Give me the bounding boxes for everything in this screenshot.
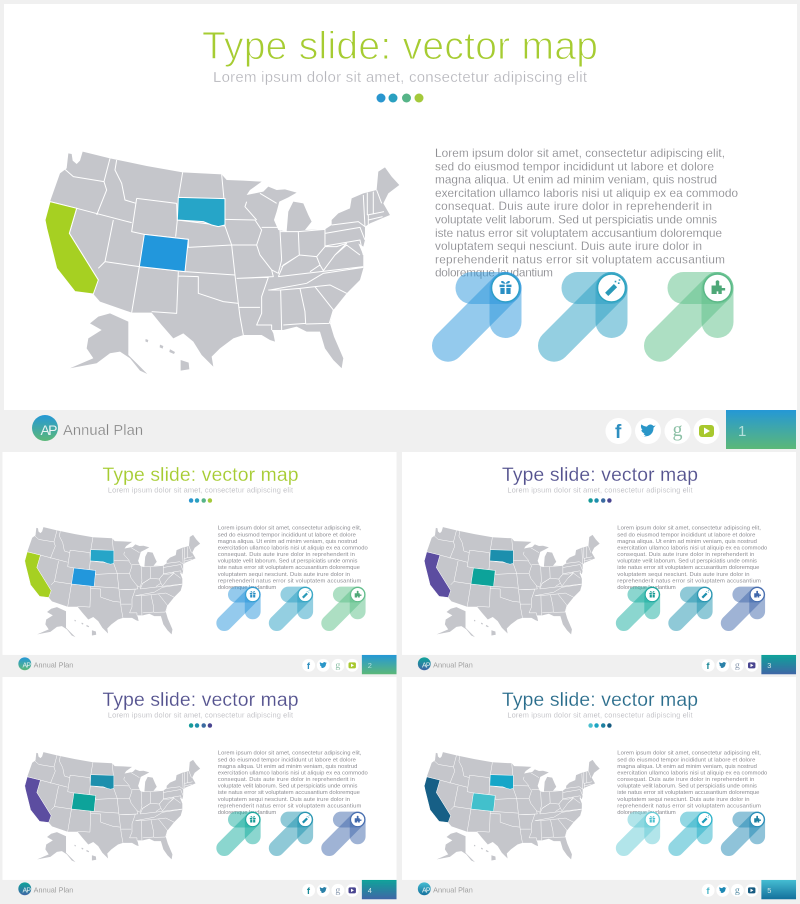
logo: AP — [23, 662, 31, 669]
slide 5 — [402, 677, 796, 899]
body text: consequat. Duis aute irure dolor in reprehenderit in — [218, 552, 355, 558]
body text: voluptate velit laborum. Sed ut perspiciatis unde omnis — [218, 559, 357, 565]
social icons: f — [615, 422, 622, 443]
body text — [218, 526, 368, 591]
body text: reprehenderit natus error sit voluptatem accusantium — [218, 803, 362, 809]
body text: magna aliqua. Ut enim ad minim veniam, quis nostrud — [218, 539, 357, 545]
body text: consequat. Duis aute irure dolor in reprehenderit in — [435, 199, 712, 213]
arrow with puzzle icon — [729, 813, 764, 848]
logo: AP — [23, 887, 31, 894]
pagination dots — [588, 723, 612, 728]
arrow with wand icon — [277, 588, 312, 623]
slide background — [4, 4, 797, 410]
body text: exercitation ullamco laboris nisi ut aliquip ex ea commodo — [218, 545, 368, 551]
slide background — [402, 452, 796, 655]
map of the United States — [424, 527, 600, 637]
body text: voluptatem sequi nesciunt. Duis aute irure dolor in — [218, 797, 350, 803]
body text: sed do eiusmod tempor incididunt ut labore et dolore — [218, 757, 356, 763]
social icons: f — [706, 660, 710, 671]
map of the United States — [45, 152, 399, 374]
arrow with puzzle icon — [329, 588, 365, 623]
body text: voluptatem sequi nesciunt. Duis aute irure dolor in — [218, 572, 350, 578]
social icons: g — [672, 419, 682, 441]
body text: reprehenderit natus error sit voluptatem accusantium — [617, 578, 761, 584]
body text: sed do eiusmod tempor incididunt ut labore et dolore — [617, 532, 755, 538]
body text — [617, 751, 767, 816]
footer bar — [4, 410, 797, 449]
body text: doloremque laudantium — [218, 585, 276, 591]
body text: iste natus error sit voluptatem accusantium doloremque — [617, 790, 759, 796]
body text: exercitation ullamco laboris nisi ut aliquip ex ea commodo — [617, 545, 767, 551]
body text: voluptate velit laborum. Sed ut perspiciatis unde omnis — [617, 559, 757, 565]
body text: sed do eiusmod tempor incididunt ut labore et dolore — [435, 159, 714, 173]
body text: sed do eiusmod tempor incididunt ut labore et dolore — [617, 757, 755, 763]
slide 2 — [2, 452, 397, 674]
logo — [32, 415, 58, 441]
logo — [418, 657, 431, 670]
slide 3 — [402, 452, 796, 674]
body text: consequat. Duis aute irure dolor in reprehenderit in — [617, 552, 754, 558]
body text: Lorem ipsum dolor sit amet, consectetur adipiscing elit, — [617, 526, 761, 532]
page number box: 5 — [767, 886, 771, 895]
logo: AP — [40, 422, 58, 438]
body text: magna aliqua. Ut enim ad minim veniam, quis nostrud — [617, 539, 757, 545]
logo — [18, 882, 31, 895]
body text — [617, 526, 767, 591]
social icons: g — [335, 885, 340, 896]
slide background — [402, 677, 796, 880]
body text: doloremque laudantium — [218, 810, 276, 816]
slide 1: main slide — [4, 4, 797, 449]
title: Type slide: vector map — [202, 25, 598, 68]
arrow with gift icon — [224, 813, 260, 848]
page number box — [761, 880, 796, 899]
footer bar — [2, 655, 397, 674]
arrow with puzzle icon — [729, 588, 764, 623]
pagination dots — [189, 723, 212, 728]
logo — [18, 657, 31, 670]
body text: Lorem ipsum dolor sit amet, consectetur adipiscing elit, — [218, 526, 362, 532]
body text: exercitation ullamco laboris nisi ut aliquip ex ea commodo — [617, 770, 767, 776]
footer bar — [402, 655, 796, 674]
subtitle: Lorem ipsum dolor sit amet, consectetur adipiscing elit — [108, 711, 293, 720]
slide background — [2, 677, 397, 880]
body text: voluptatem sequi nesciunt. Duis aute irure dolor in — [435, 239, 702, 253]
social icons — [606, 418, 720, 444]
body text — [435, 146, 738, 280]
title: Type slide: vector map — [102, 465, 299, 486]
body text: iste natus error sit voluptatem accusantium doloremque — [218, 565, 360, 571]
social icons — [302, 659, 359, 672]
body text: reprehenderit natus error sit voluptatem accusantium — [218, 578, 362, 584]
page number box: 3 — [767, 661, 771, 670]
slide background — [2, 452, 397, 655]
arrow with wand icon — [554, 274, 626, 346]
footer bar — [2, 880, 397, 899]
pagination dots — [189, 498, 212, 503]
page number box — [362, 655, 397, 674]
logo: AP — [422, 662, 431, 669]
arrow with puzzle icon — [329, 813, 365, 848]
title: Type slide: vector map — [102, 690, 299, 711]
body text: iste natus error sit voluptatem accusantium doloremque — [218, 790, 360, 796]
social icons: f — [307, 660, 311, 671]
page number box — [362, 880, 397, 899]
social icons: f — [307, 885, 311, 896]
body text: sed do eiusmod tempor incididunt ut labore et dolore — [218, 532, 356, 538]
pagination dots — [588, 498, 612, 503]
body text: voluptate velit laborum. Sed ut perspiciatis unde omnis — [435, 212, 717, 226]
body text: magna aliqua. Ut enim ad minim veniam, quis nostrud — [435, 173, 717, 187]
body text: Lorem ipsum dolor sit amet, consectetur adipiscing elit, — [435, 146, 725, 160]
brand name: Annual Plan — [433, 885, 473, 894]
arrow with gift icon — [624, 813, 659, 848]
pagination dots — [376, 94, 424, 102]
footer bar — [402, 880, 796, 899]
subtitle: Lorem ipsum dolor sit amet, consectetur adipiscing elit — [213, 69, 588, 86]
arrow with gift icon — [224, 588, 260, 623]
body text: doloremque laudantium — [617, 585, 676, 591]
social icons — [702, 659, 758, 672]
arrow with gift icon — [624, 588, 659, 623]
social icons — [302, 884, 359, 897]
body text: voluptate velit laborum. Sed ut perspiciatis unde omnis — [617, 784, 757, 790]
arrow with wand icon — [676, 813, 712, 848]
subtitle: Lorem ipsum dolor sit amet, consectetur adipiscing elit — [507, 486, 693, 495]
body text: iste natus error sit voluptatem accusantium doloremque — [617, 565, 759, 571]
logo — [418, 882, 431, 895]
title: Type slide: vector map — [502, 690, 698, 711]
subtitle: Lorem ipsum dolor sit amet, consectetur adipiscing elit — [507, 711, 693, 720]
body text: consequat. Duis aute irure dolor in reprehenderit in — [218, 777, 355, 783]
body text: exercitation ullamco laboris nisi ut aliquip ex ea commodo — [218, 770, 368, 776]
arrow with gift icon — [448, 274, 520, 346]
body text: Lorem ipsum dolor sit amet, consectetur adipiscing elit, — [617, 751, 761, 757]
body text: Lorem ipsum dolor sit amet, consectetur adipiscing elit, — [218, 751, 362, 757]
page number box: 4 — [368, 886, 372, 895]
body text: magna aliqua. Ut enim ad minim veniam, quis nostrud — [218, 764, 357, 770]
body text: exercitation ullamco laboris nisi ut aliquip ex ea commodo — [435, 186, 738, 200]
arrow with puzzle icon — [660, 274, 732, 346]
social icons: g — [335, 660, 340, 671]
social icons: f — [706, 885, 710, 896]
body text: voluptatem sequi nesciunt. Duis aute irure dolor in — [617, 572, 749, 578]
map of the United States — [25, 527, 200, 637]
slide 4 — [2, 677, 397, 899]
social icons: g — [735, 660, 740, 671]
body text: iste natus error sit voluptatem accusantium doloremque — [435, 226, 722, 240]
logo: AP — [422, 887, 431, 894]
page number box: 2 — [368, 661, 372, 670]
body text — [218, 751, 368, 816]
map of the United States — [25, 752, 200, 862]
arrow with wand icon — [277, 813, 312, 848]
body text: doloremque laudantium — [435, 266, 553, 280]
arrow with wand icon — [676, 588, 712, 623]
body text: voluptate velit laborum. Sed ut perspiciatis unde omnis — [218, 784, 357, 790]
body text: reprehenderit natus error sit voluptatem accusantium — [435, 252, 725, 266]
social icons: g — [735, 885, 740, 896]
brand name: Annual Plan — [433, 660, 473, 669]
map of the United States — [424, 752, 600, 862]
body text: magna aliqua. Ut enim ad minim veniam, quis nostrud — [617, 764, 757, 770]
brand name: Annual Plan — [34, 660, 73, 669]
body text: voluptatem sequi nesciunt. Duis aute irure dolor in — [617, 797, 749, 803]
body text: consequat. Duis aute irure dolor in reprehenderit in — [617, 777, 754, 783]
page number box: 1 — [738, 423, 746, 440]
title: Type slide: vector map — [502, 465, 698, 486]
brand name: Annual Plan — [63, 423, 143, 439]
brand name: Annual Plan — [34, 885, 73, 894]
page number box — [726, 410, 796, 449]
body text: reprehenderit natus error sit voluptatem accusantium — [617, 803, 761, 809]
social icons — [702, 884, 758, 897]
page number box — [761, 655, 796, 674]
body text: doloremque laudantium — [617, 810, 676, 816]
subtitle: Lorem ipsum dolor sit amet, consectetur adipiscing elit — [108, 486, 293, 495]
